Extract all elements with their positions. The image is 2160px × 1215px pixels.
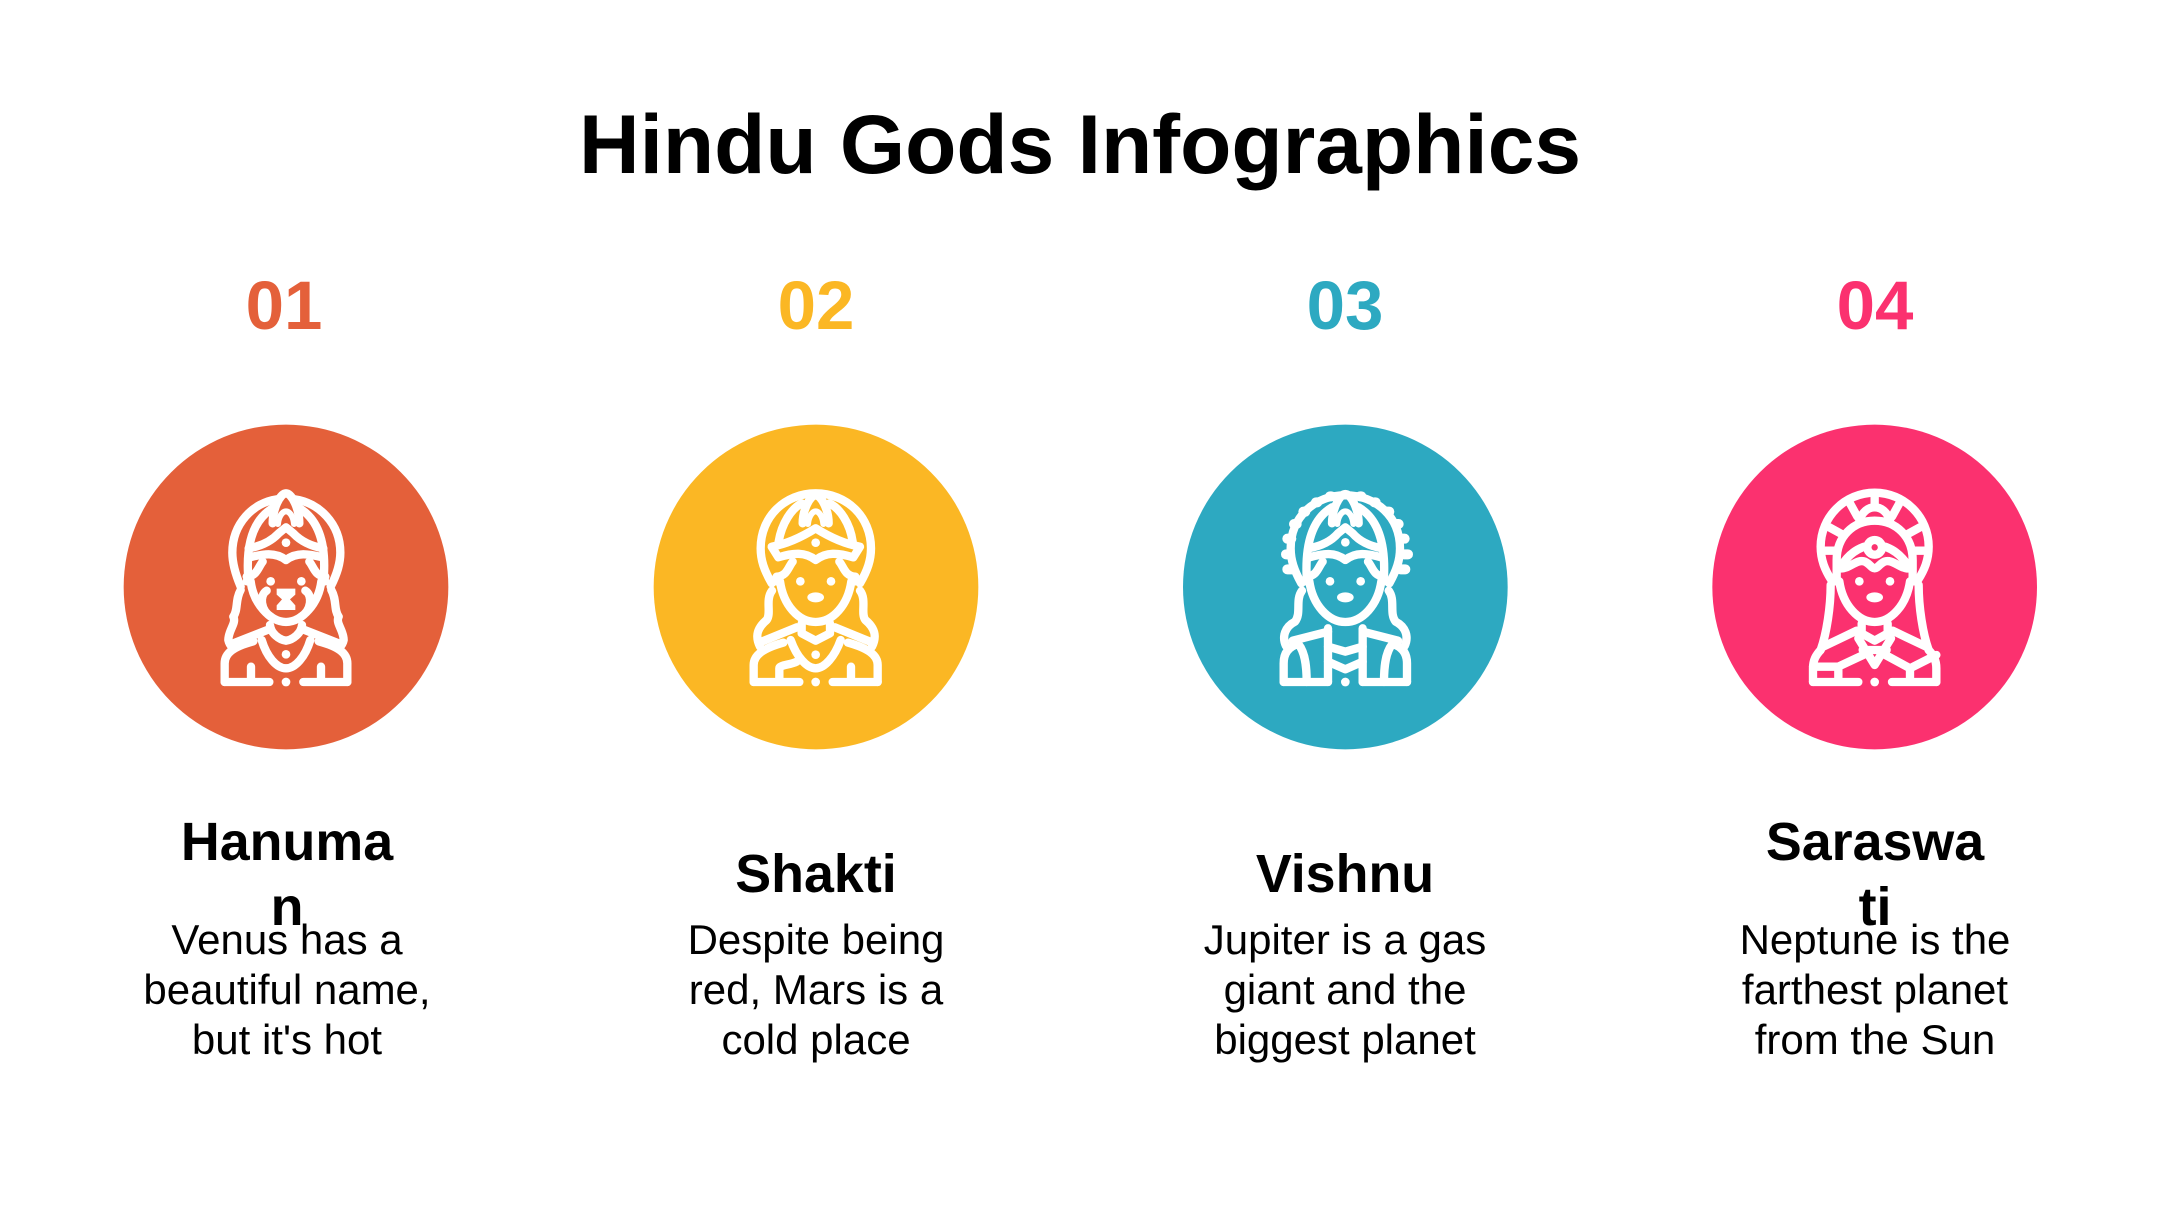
panel: Vishnu icon badge	[1183, 424, 1508, 750]
heading: Hanuman	[181, 812, 394, 936]
heading: Vishnu: Vishnu	[1256, 844, 1434, 904]
text: Hanuman description	[143, 916, 431, 1063]
text: Vishnu description: giant and the	[1224, 966, 1466, 1013]
text: Shakti description: red, Mars is a	[689, 966, 943, 1013]
number 03: 03	[1307, 267, 1383, 344]
number 02: 02	[778, 267, 854, 344]
heading: Hanuman: Hanuma	[181, 812, 393, 872]
panel: Saraswati icon badge	[1712, 424, 2037, 750]
panel: Hanuman icon badge	[124, 424, 448, 750]
heading: Hanuman: n	[271, 876, 303, 936]
title: Hindu Gods Infographics	[579, 97, 1581, 191]
text: Hanuman description: beautiful name,	[143, 966, 431, 1013]
text: Vishnu description: Jupiter is a gas	[1204, 916, 1486, 963]
text: Saraswati description: Neptune is the	[1740, 916, 2010, 963]
text: Shakti description: cold place	[721, 1016, 911, 1063]
text: Vishnu description: biggest planet	[1214, 1016, 1476, 1063]
text: Shakti description: Despite being	[688, 916, 944, 963]
heading: Saraswati	[1766, 812, 1984, 936]
text: Hanuman description: but it's hot	[192, 1016, 382, 1063]
heading: Saraswati: Saraswa	[1766, 812, 1984, 872]
number 01: 01	[246, 267, 322, 344]
heading: Shakti: Shakti	[735, 844, 897, 904]
heading: Saraswati: ti	[1859, 876, 1891, 936]
text: Saraswati description: from the Sun	[1755, 1016, 1995, 1063]
text: Vishnu description	[1204, 916, 1486, 1063]
panel: Shakti icon badge	[654, 424, 978, 750]
text: Hanuman description: Venus has a	[171, 916, 403, 963]
text: Saraswati description: farthest planet	[1742, 966, 2008, 1013]
number 04: 04	[1837, 267, 1913, 344]
text: Saraswati description	[1740, 916, 2010, 1063]
text: Shakti description	[688, 916, 944, 1063]
